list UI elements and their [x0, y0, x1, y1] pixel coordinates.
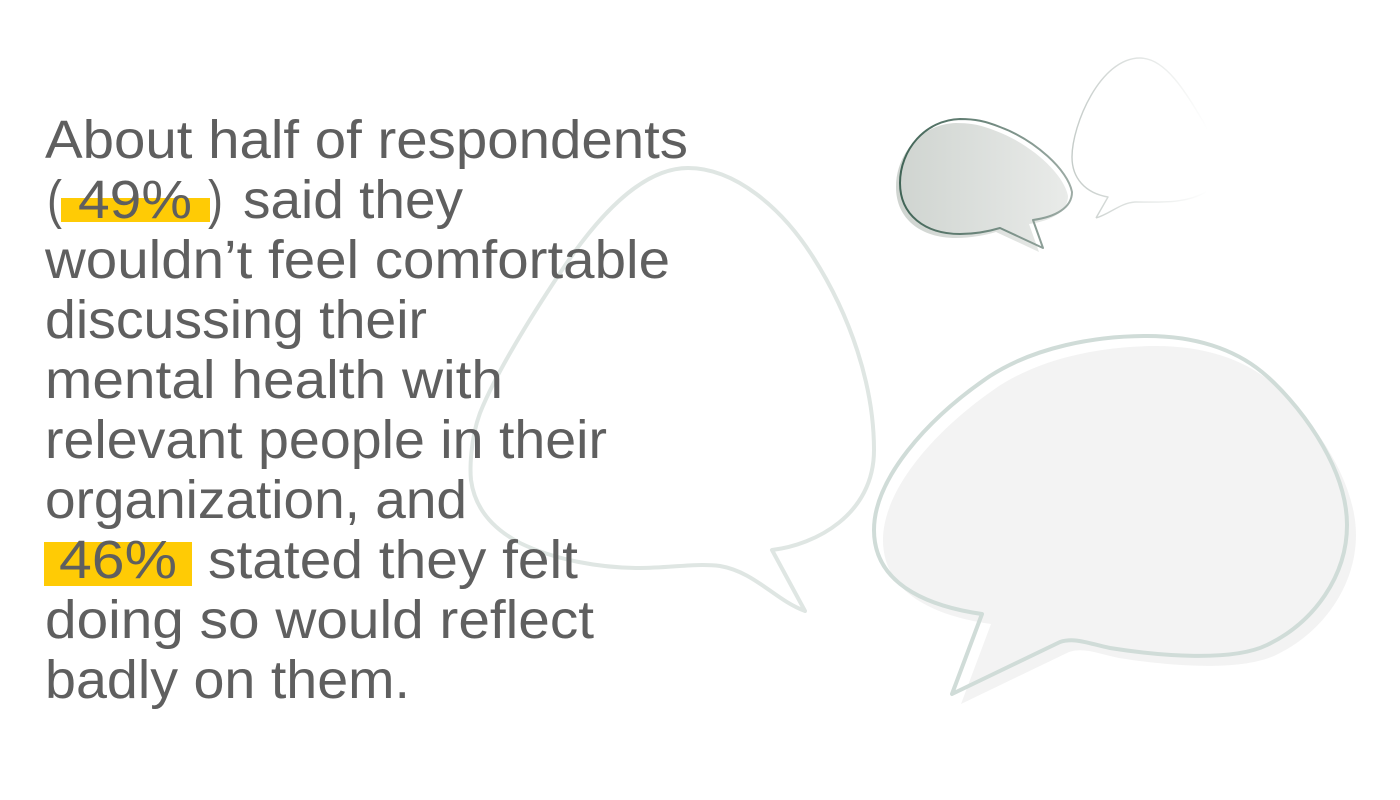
body text [44, 110, 688, 710]
speech bubble: small dark filled [896, 119, 1072, 252]
body text: 49% [78, 170, 192, 230]
body text: wouldn’t feel comfortable [44, 230, 670, 290]
speech bubble: large outline behind text [471, 168, 874, 611]
body text: About half of respondents [45, 110, 688, 170]
body text: 46% [59, 530, 177, 590]
body text: doing so would reflect [45, 590, 594, 650]
body text: relevant people in their [45, 410, 607, 470]
body text: ) [208, 170, 223, 230]
body text: ( [47, 170, 62, 230]
body text: badly on them. [45, 650, 410, 710]
body text: stated they felt [208, 530, 578, 590]
body text: discussing their [45, 290, 427, 350]
highlight: 46% [44, 542, 192, 586]
body text: said they [243, 170, 463, 230]
speech bubble: faint outline fading right [1072, 58, 1208, 218]
highlight: 49% [61, 198, 210, 222]
body text: organization, and [45, 470, 467, 530]
speech bubble: large filled, lower right [874, 336, 1356, 704]
body text: mental health with [45, 350, 503, 410]
